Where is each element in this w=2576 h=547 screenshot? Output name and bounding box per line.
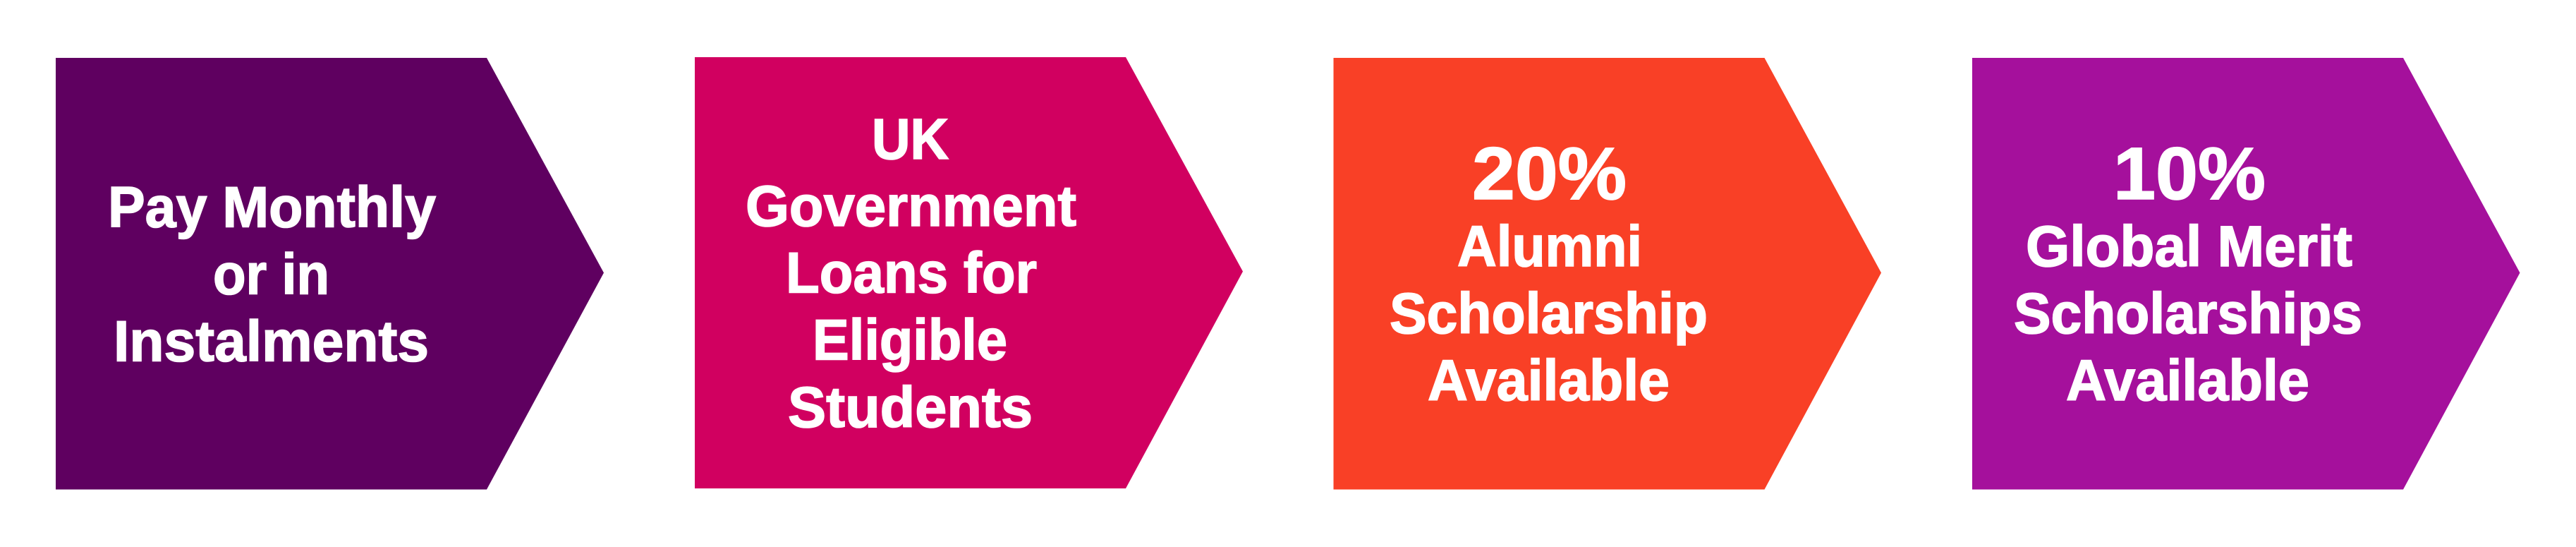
text: 10% global merit scholarships available: 10% [2113, 133, 2266, 215]
text: 20% alumni scholarship available: Alumni [1457, 215, 1642, 279]
panel: alumni scholarship [1333, 58, 1881, 490]
panel: pay monthly [56, 58, 604, 490]
text: pay monthly or in instalments: Instalments [114, 310, 429, 374]
text: UK government loans for eligible students [746, 107, 1076, 440]
arrow shape: violet [1972, 58, 2520, 490]
text: 20% alumni scholarship available: 20% [1472, 133, 1627, 215]
text: UK government loans for eligible students: Students [788, 375, 1033, 440]
text: pay monthly or in instalments: or in [213, 243, 329, 307]
text: UK government loans for eligible students: Loans for [786, 241, 1037, 306]
text: 10% global merit scholarships available [2014, 133, 2362, 413]
text: 10% global merit scholarships available: Global Merit [2026, 215, 2352, 279]
text: UK government loans for eligible students: Eligible [813, 308, 1007, 373]
text: 20% alumni scholarship available: Available [1428, 349, 1670, 413]
text: 20% alumni scholarship available [1390, 133, 1708, 413]
text: pay monthly or in instalments: Pay Monthly [108, 175, 436, 239]
panel: government loans [695, 57, 1243, 488]
arrow shape: magenta [695, 57, 1243, 488]
panel: global merit scholarships [1972, 58, 2520, 490]
arrow shape: orange red [1333, 58, 1881, 490]
text: 20% alumni scholarship available: Scholarship [1390, 282, 1708, 346]
text: 10% global merit scholarships available: Scholarships [2014, 282, 2362, 346]
text: UK government loans for eligible students: Government [746, 174, 1076, 239]
text: pay monthly or in instalments [108, 175, 436, 374]
text: 10% global merit scholarships available: Available [2066, 349, 2309, 413]
arrow shape: dark purple [56, 58, 604, 490]
text: UK government loans for eligible students: UK [872, 107, 949, 172]
